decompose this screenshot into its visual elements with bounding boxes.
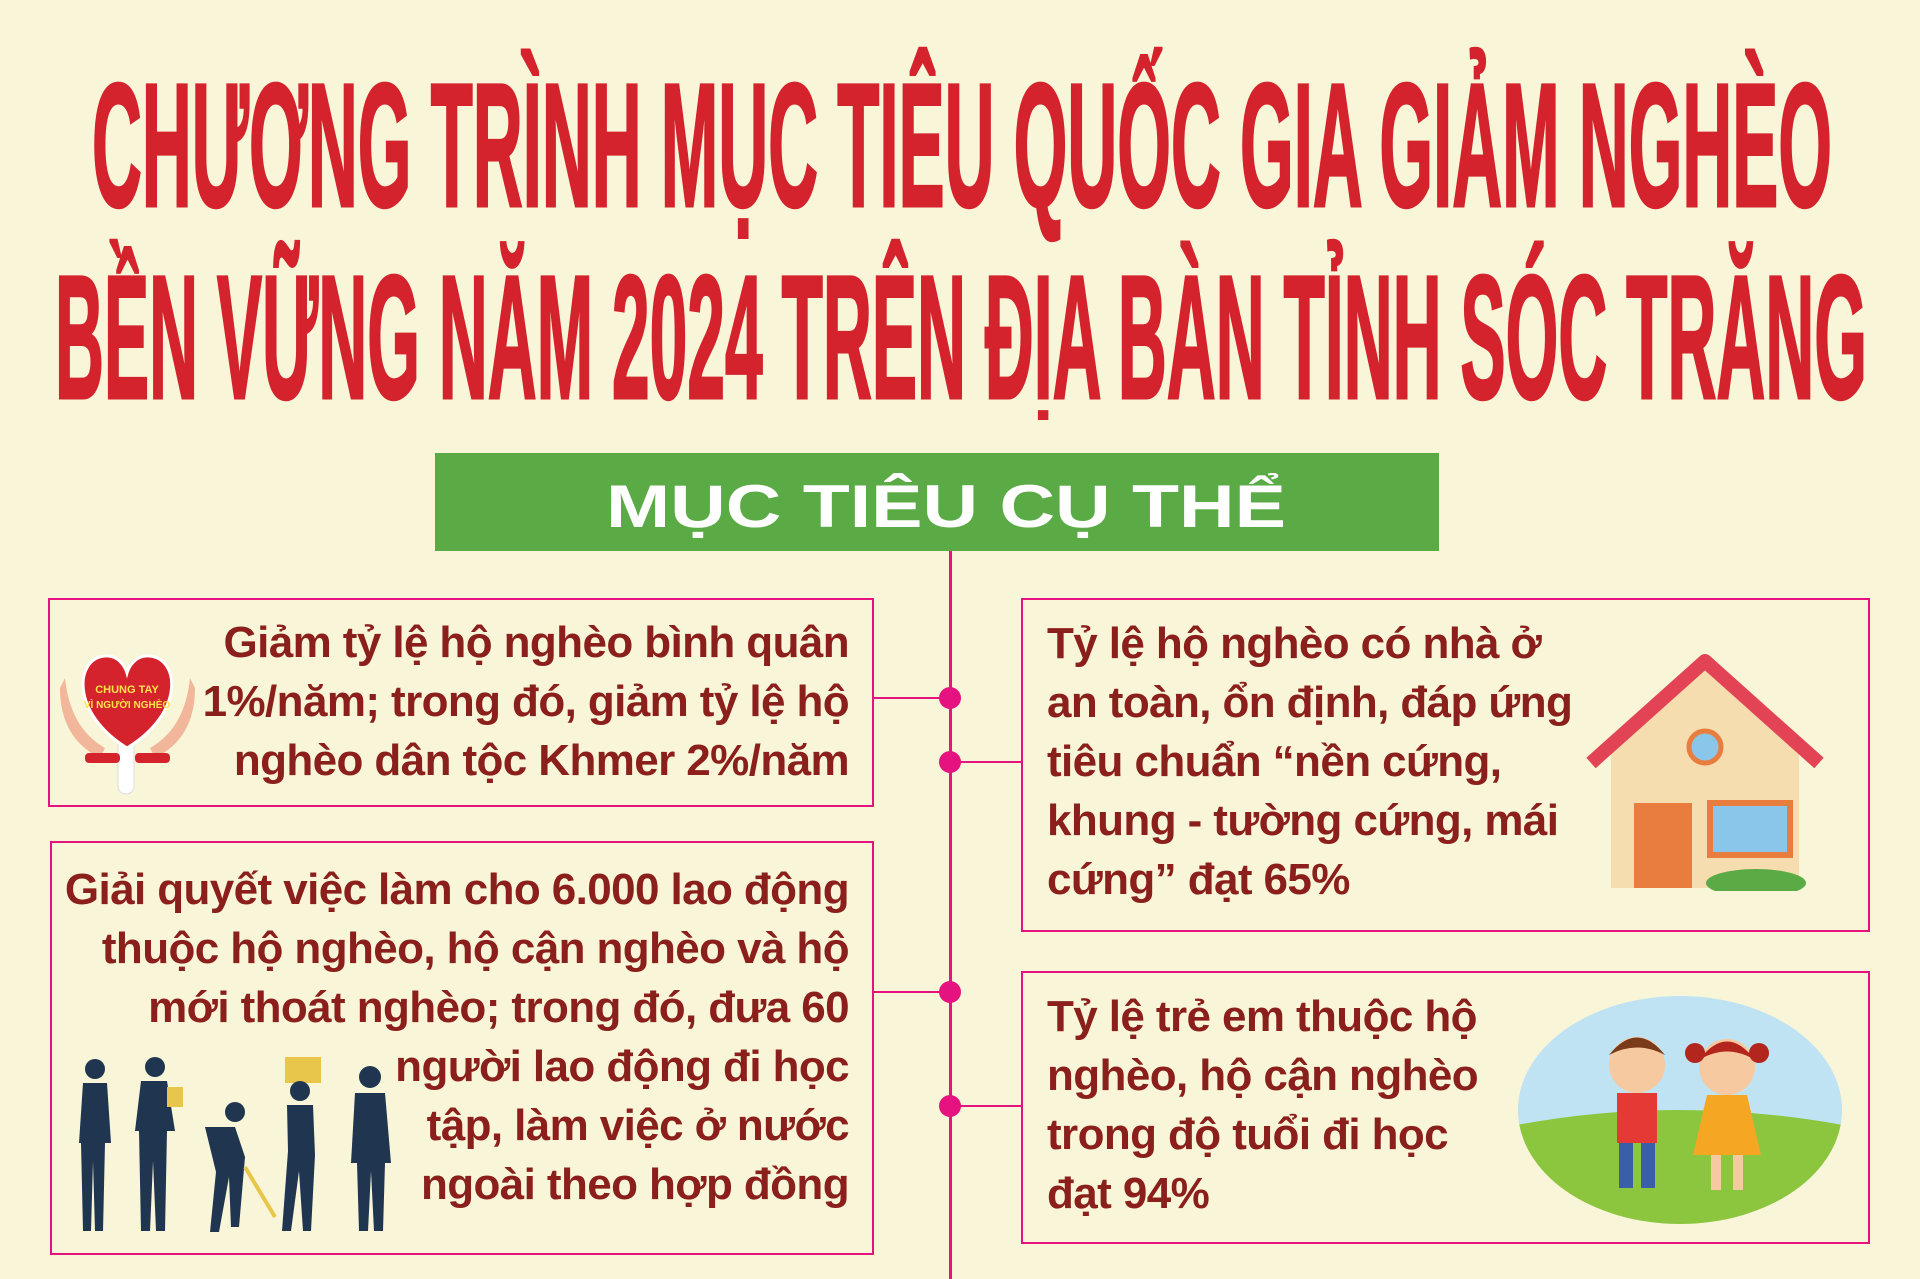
text: jobs target: Giải quyết việc làm cho 6.000 lao động	[65, 865, 849, 914]
text: jobs target: mới thoát nghèo; trong đó, đưa 60	[148, 983, 849, 1032]
text: housing target: cứng” đạt 65%	[1047, 855, 1350, 904]
panel: housing	[1021, 598, 1870, 932]
text: children target: trong độ tuổi đi học	[1047, 1110, 1448, 1159]
text: housing target: Tỷ lệ hộ nghèo có nhà ở	[1047, 619, 1541, 668]
text: poverty rate	[203, 618, 849, 785]
text: children target	[1047, 992, 1478, 1218]
text: housing target: khung - tường cứng, mái	[1047, 796, 1558, 845]
text: housing target	[1047, 619, 1572, 904]
text: jobs target	[65, 865, 849, 1209]
panel: jobs	[50, 841, 874, 1255]
text: jobs target: thuộc hộ nghèo, hộ cận nghèo và hộ	[102, 924, 849, 973]
timeline line	[949, 551, 952, 1279]
text: children target: đạt 94%	[1047, 1169, 1209, 1218]
panel: poverty reduction	[48, 598, 874, 807]
title	[55, 46, 1867, 420]
connectors	[874, 697, 950, 699]
text: children target: Tỷ lệ trẻ em thuộc hộ	[1047, 992, 1477, 1041]
banner: mục tiêu cụ thể: MỤC TIÊU CỤ THỂ	[606, 473, 1286, 540]
text: housing target: tiêu chuẩn “nền cứng,	[1047, 737, 1501, 786]
text: jobs target: tập, làm việc ở nước	[427, 1101, 849, 1150]
text: jobs target: người lao động đi học	[395, 1042, 849, 1091]
text: jobs target: ngoài theo hợp đồng	[421, 1160, 849, 1209]
panel: children schooling	[1021, 971, 1870, 1244]
text: children target: nghèo, hộ cận nghèo	[1047, 1051, 1478, 1100]
text: poverty rate: nghèo dân tộc Khmer 2%/năm	[234, 736, 849, 785]
icon: heart hands: VÌ NGƯỜI NGHÈO	[84, 698, 170, 711]
banner: mục tiêu cụ thể	[435, 453, 1439, 551]
icon: house	[1586, 654, 1824, 891]
icon: heart hands	[60, 654, 195, 794]
icon: heart hands: CHUNG TAY	[95, 684, 159, 696]
icon: workers	[79, 1057, 391, 1232]
icon: kids	[1518, 996, 1842, 1224]
text: poverty rate: 1%/năm; trong đó, giảm tỷ lệ hộ	[203, 677, 849, 726]
text: poverty rate: Giảm tỷ lệ hộ nghèo bình quân	[224, 618, 849, 667]
text: housing target: an toàn, ổn định, đáp ứng	[1047, 678, 1572, 727]
